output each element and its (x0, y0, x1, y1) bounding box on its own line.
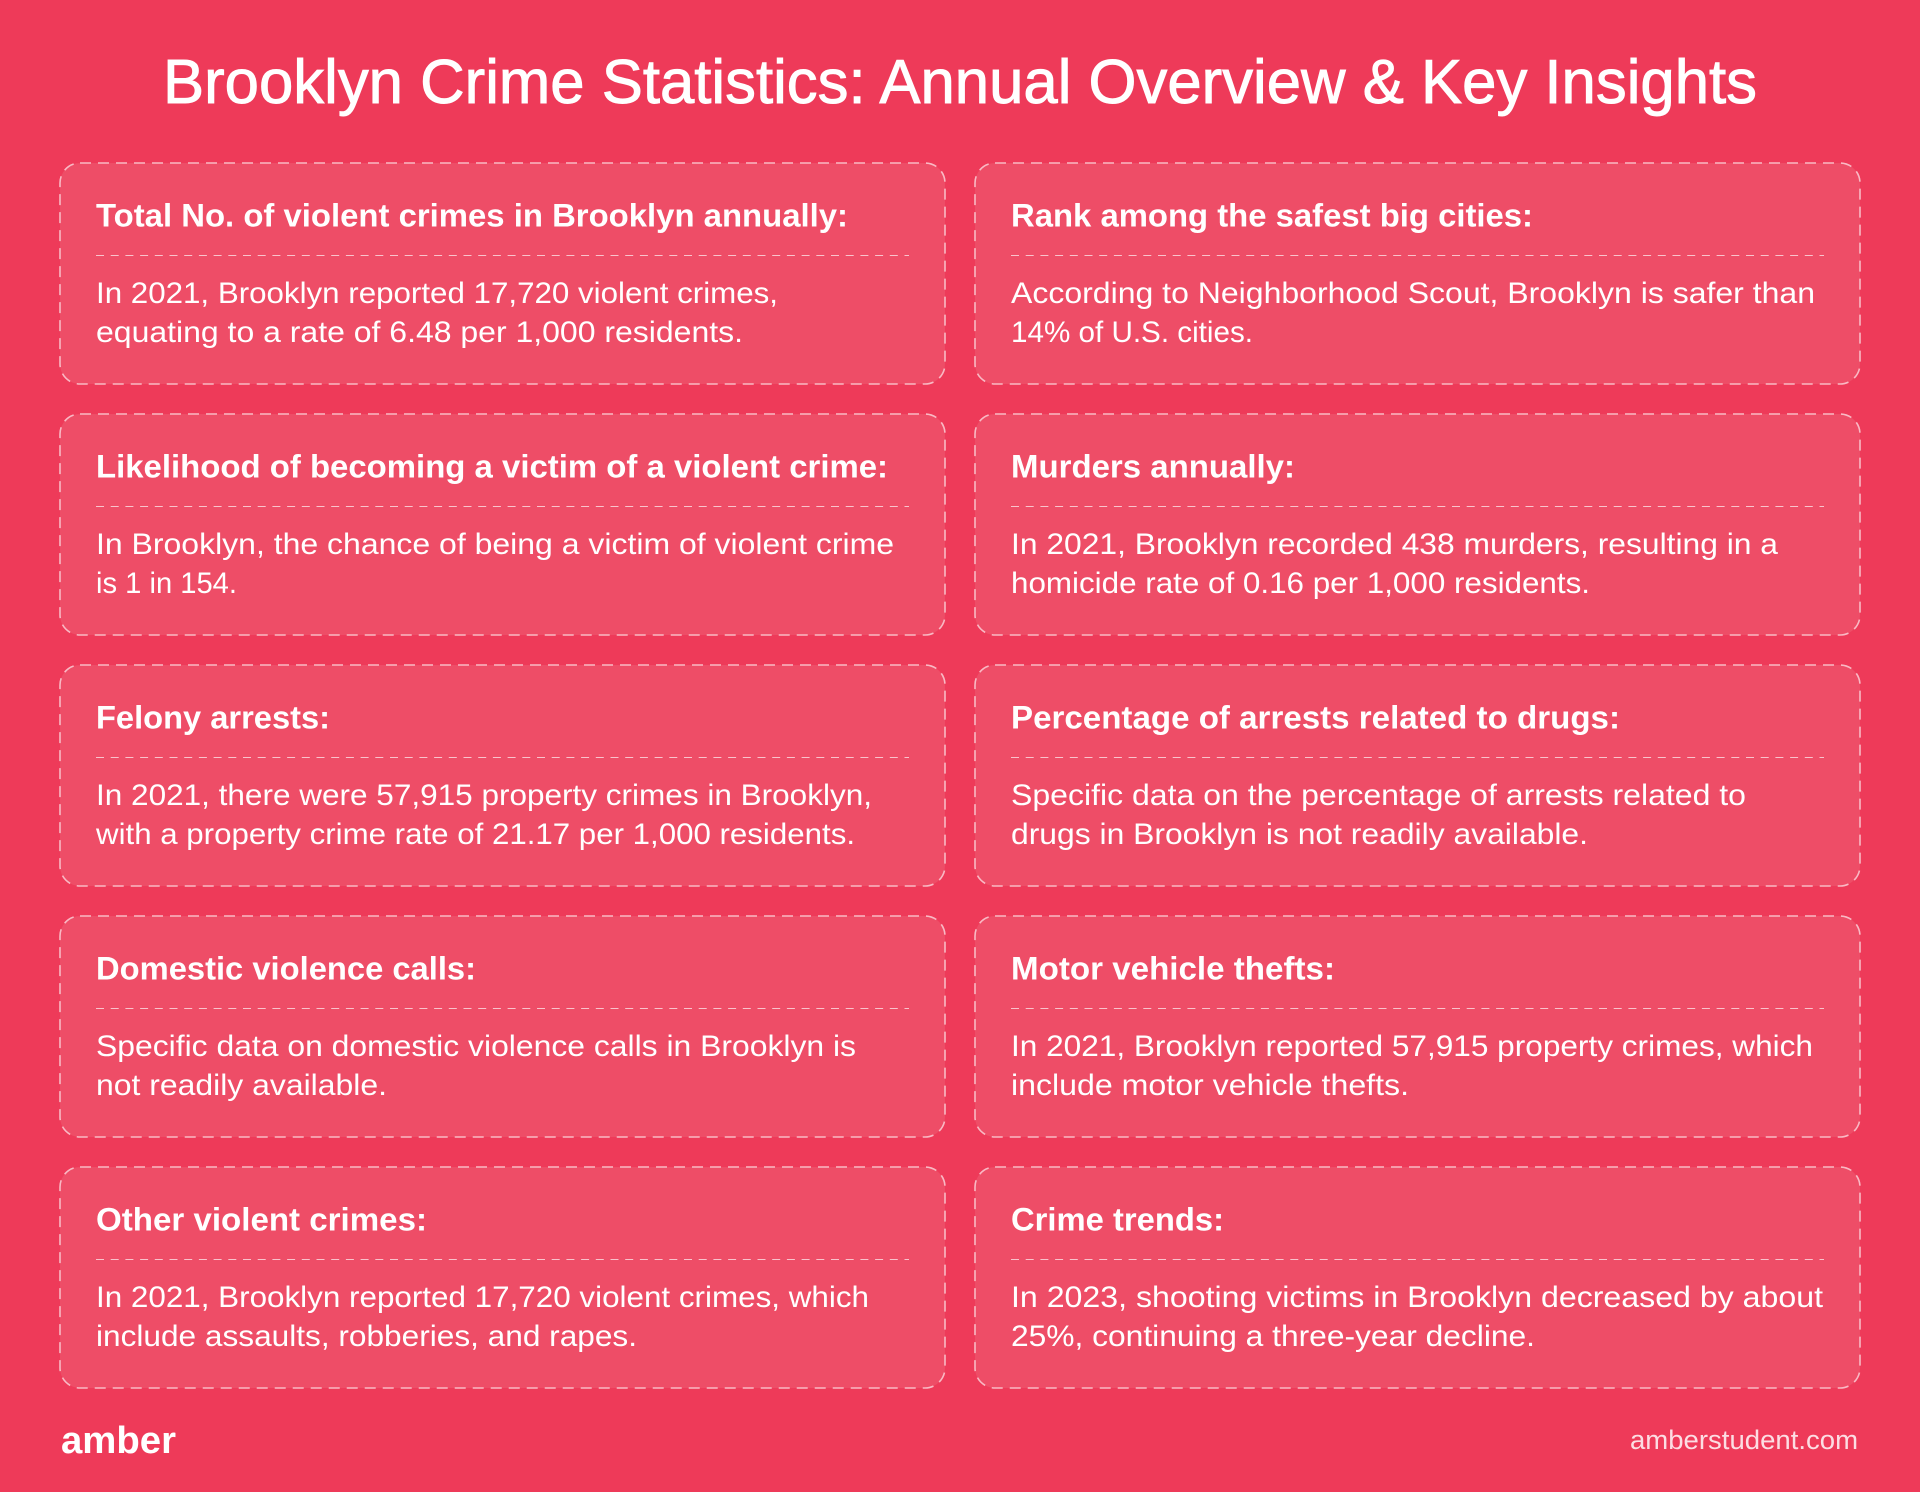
heading: Felony arrests: (96, 700, 330, 736)
body text (96, 1030, 856, 1102)
website url: amberstudent.com (1630, 1425, 1858, 1455)
panel: likelihood of victimisation (60, 414, 945, 635)
body text (96, 1281, 869, 1353)
panel: total violent crimes (60, 163, 945, 384)
body text: include assaults, robberies, and rapes. (96, 1320, 637, 1353)
body text: In 2021, Brooklyn reported 17,720 violent crimes, which (96, 1281, 869, 1314)
body text (95, 779, 872, 851)
body text: In 2021, Brooklyn reported 17,720 violent crimes, (96, 277, 778, 310)
body text (1011, 1281, 1824, 1353)
body text: drugs in Brooklyn is not readily available. (1011, 818, 1588, 851)
panel: drug-related arrests (975, 665, 1860, 886)
body text (96, 277, 778, 349)
body text: not readily available. (96, 1069, 387, 1102)
heading: Crime trends: (1011, 1202, 1224, 1238)
heading: Motor vehicle thefts: (1011, 950, 1335, 986)
panel: crime trends (975, 1167, 1860, 1388)
body text: include motor vehicle thefts. (1011, 1069, 1409, 1102)
panel: safest big cities rank (975, 163, 1860, 384)
body text: 25%, continuing a three-year decline. (1011, 1320, 1535, 1353)
body text: In Brooklyn, the chance of being a victim of violent crime (96, 528, 894, 561)
body text: In 2021, Brooklyn reported 57,915 property crimes, which (1011, 1030, 1813, 1063)
body text: homicide rate of 0.16 per 1,000 residents. (1011, 567, 1590, 600)
heading: Percentage of arrests related to drugs: (1011, 700, 1620, 736)
body text (96, 528, 894, 600)
body text (1011, 1030, 1813, 1102)
panel: motor vehicle thefts (975, 916, 1860, 1137)
body text: 14% of U.S. cities. (1011, 316, 1253, 349)
body text: is 1 in 154. (96, 567, 237, 600)
panel: felony arrests (60, 665, 945, 886)
body text: equating to a rate of 6.48 per 1,000 residents. (96, 316, 743, 349)
heading: Other violent crimes: (96, 1202, 427, 1238)
body text: In 2023, shooting victims in Brooklyn decreased by about (1011, 1281, 1824, 1314)
panel: domestic violence calls (60, 916, 945, 1137)
body text (1011, 277, 1815, 349)
heading: Likelihood of becoming a victim of a violent crime: (96, 448, 888, 484)
body text: Specific data on the percentage of arrests related to (1011, 779, 1746, 812)
title: Brooklyn Crime Statistics: Annual Overview & Key Insights (163, 48, 1757, 117)
body text (1011, 779, 1746, 851)
heading: Murders annually: (1011, 448, 1295, 484)
logo: amber: amber (61, 1420, 176, 1462)
heading: Domestic violence calls: (96, 950, 476, 986)
body text: Specific data on domestic violence calls in Brooklyn is (96, 1030, 856, 1063)
body text: with a property crime rate of 21.17 per 1,000 residents. (95, 818, 855, 851)
heading: Total No. of violent crimes in Brooklyn annually: (96, 198, 848, 234)
body text (1011, 528, 1778, 600)
heading: Rank among the safest big cities: (1011, 198, 1533, 234)
panel: murders annually (975, 414, 1860, 635)
body text: In 2021, there were 57,915 property crimes in Brooklyn, (96, 779, 872, 812)
body text: According to Neighborhood Scout, Brooklyn is safer than (1011, 277, 1815, 310)
panel: other violent crimes (60, 1167, 945, 1388)
body text: In 2021, Brooklyn recorded 438 murders, resulting in a (1011, 528, 1778, 561)
